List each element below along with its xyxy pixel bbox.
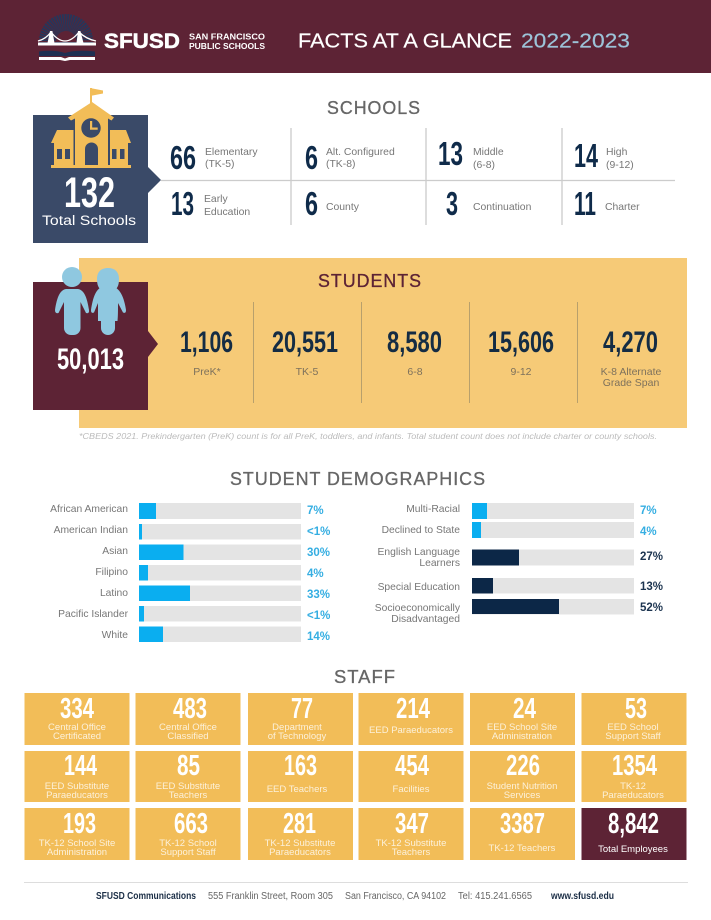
tile: 281 (248, 808, 353, 860)
footnote: *CBEDS 2021. Prekindergarten (PreK) count is for all PreK, toddlers, and infants. Total student count does not include charter or county schools. (79, 431, 657, 441)
tile: 281: Paraeducators (269, 847, 331, 858)
tile: 334: Central Office (48, 722, 106, 733)
tile: 3387: TK-12 Teachers (489, 843, 556, 854)
stat: alternatively configured: Alt. Configured (326, 147, 395, 158)
stat: elementary: (TK-5) (205, 159, 234, 170)
icon: SFUSD bridge and book logo (38, 23, 96, 61)
tile: 663 (136, 808, 240, 860)
stat: high: (9-12) (606, 160, 634, 171)
bar: Latino: 33% (307, 589, 330, 601)
stat: TK-5: 20,551 (272, 326, 338, 359)
stat: alternatively configured (305, 139, 395, 176)
stat: 6-8: 6-8 (407, 366, 423, 378)
icon: school building (51, 88, 131, 168)
stat: elementary: 66 (170, 139, 196, 176)
bar: English Language Learners: Learners (419, 558, 460, 569)
bar: Multi-Racial: Multi-Racial (406, 504, 460, 515)
footer contact line: San Francisco, CA 94102 (345, 891, 446, 902)
total students box (33, 267, 158, 410)
logo wordmark (104, 30, 266, 53)
bar: Pacific Islander: <1% (307, 610, 330, 622)
bar: Filipino: Filipino (95, 567, 128, 578)
tile: 483: Central Office (159, 722, 217, 733)
bar: Multi-Racial: 7% (640, 505, 657, 517)
tile: 1354: 1354 (612, 750, 657, 782)
stat: county: County (326, 202, 360, 213)
tile: 53: Support Staff (605, 731, 661, 742)
tile: 24: EED School Site (487, 722, 557, 733)
tile: 53 (582, 693, 686, 745)
stat: early education (171, 185, 250, 222)
tile: 193: Administration (47, 847, 107, 858)
heading: students: STUDENTS (318, 271, 422, 291)
tile: 214: 214 (396, 693, 430, 725)
stat: elementary (170, 139, 258, 176)
stat: middle: Middle (473, 147, 504, 158)
bar chart: student groups (375, 503, 663, 625)
bar: English Language Learners (378, 547, 663, 569)
tile: 77: 77 (291, 693, 313, 725)
stat: 9-12: 15,606 (488, 326, 554, 359)
stat: elementary: Elementary (205, 147, 258, 158)
tile: 281: TK-12 Substitute (265, 838, 335, 849)
bar: African American (50, 503, 324, 519)
stat: PreK (180, 326, 233, 378)
panel: students (33, 258, 687, 428)
tile: 193: TK-12 School Site (39, 838, 115, 849)
tile: 454: 454 (395, 750, 429, 782)
stat: K-8 alternate grade span: 4,270 (603, 326, 658, 359)
stat: charter (574, 185, 640, 222)
bar: Asian (102, 544, 330, 560)
stat: 9-12: 9-12 (510, 366, 532, 378)
footer contact line: Tel: 415.241.6565 (458, 891, 532, 902)
tile: 85 (136, 750, 240, 802)
stat: charter: Charter (605, 202, 640, 213)
bar: Asian: Asian (102, 546, 128, 557)
tile: 334: 334 (60, 693, 94, 725)
tile: 85: EED Substitute (156, 781, 220, 792)
total schools box: Total Schools (42, 213, 136, 228)
stat: TK-5: TK-5 (296, 366, 319, 378)
stat: county (305, 185, 360, 222)
tile: 144: EED Substitute (45, 781, 109, 792)
tile: 663: TK-12 School (159, 838, 217, 849)
tile: 214 (358, 693, 464, 745)
stat: high: 14 (574, 137, 598, 174)
stat: K-8 alternate grade span: Grade Span (603, 377, 659, 389)
bar: African American: 7% (307, 505, 324, 517)
tile: 347 (358, 808, 464, 860)
stat: early education: Education (204, 207, 250, 218)
tile: 77: Department (272, 722, 322, 733)
tile: 193 (24, 808, 130, 860)
stat: middle: 13 (438, 135, 463, 172)
stat: alternatively configured: (TK-8) (326, 159, 355, 170)
tile: 454 (358, 750, 464, 802)
stat: continuation (446, 185, 532, 222)
bar chart: race and ethnicity (50, 503, 330, 643)
bar: Pacific Islander: Pacific Islander (58, 609, 129, 620)
title (298, 30, 630, 52)
tile: 1354 (582, 750, 686, 802)
tile: 663: Support Staff (160, 847, 216, 858)
tile: 334: Certificated (53, 731, 101, 742)
stat: K-8 alternate grade span: K-8 Alternate (601, 366, 662, 378)
bar: American Indian (54, 524, 330, 540)
tile: 281: 281 (283, 808, 316, 840)
bar: Latino (100, 586, 330, 601)
tile: 226: Services (504, 790, 540, 801)
tile: 53: 53 (625, 693, 647, 725)
tile: 214: EED Paraeducators (369, 725, 453, 736)
tile: 347: 347 (395, 808, 429, 840)
panel: schools (33, 88, 675, 243)
bar: Special Education: Special Education (378, 582, 460, 593)
total students box: 50,013 (57, 343, 124, 376)
bar: Socioeconomically Disadvantaged: Disadvantaged (391, 614, 460, 625)
logo wordmark: SAN FRANCISCO (189, 32, 265, 42)
bar: Special Education: 13% (640, 581, 663, 593)
stat: county: 6 (305, 185, 318, 222)
tile: 663: 663 (174, 808, 208, 840)
panel: student demographics (50, 469, 663, 643)
tile: 24: 24 (513, 693, 536, 725)
bar: White: 14% (307, 631, 330, 643)
bar: Socioeconomically Disadvantaged: Socioeconomically (375, 603, 461, 614)
stat: continuation: 3 (446, 185, 458, 222)
bar: African American: African American (50, 504, 128, 515)
tile: 347: Teachers (392, 847, 431, 858)
stat: early education: Early (204, 194, 228, 205)
tile: 24: Administration (492, 731, 552, 742)
stat: charter: 11 (574, 185, 596, 222)
tile: 483: 483 (173, 693, 207, 725)
stat: 9-12 (488, 326, 554, 378)
tile: total employees (582, 808, 686, 860)
tile: 334 (24, 693, 130, 745)
tile: 163: 163 (284, 750, 317, 782)
footer contact line: www.sfusd.edu (550, 891, 614, 902)
heading: staff: STAFF (334, 667, 396, 687)
heading: student demographics: STUDENT DEMOGRAPHICS (230, 469, 486, 489)
bar: American Indian: American Indian (54, 525, 128, 536)
tile: 3387: 3387 (500, 808, 545, 840)
stat: 6-8: 8,580 (387, 326, 442, 359)
tile: 1354: TK-12 (620, 781, 646, 792)
stat: middle (438, 135, 504, 172)
tile: 226: Student Nutrition (487, 781, 557, 792)
bar: Pacific Islander (58, 606, 330, 622)
tile: 77 (248, 693, 353, 745)
bar: Socioeconomically Disadvantaged (375, 599, 663, 625)
bar: Filipino: 4% (307, 568, 324, 580)
bar: White (102, 626, 330, 643)
tile: total employees: Total Employees (598, 844, 668, 855)
tile: 85: Teachers (169, 790, 208, 801)
bar: Filipino (95, 565, 324, 580)
panel: staff (24, 667, 686, 860)
total schools box: 132 (64, 169, 115, 217)
tile: 77: of Technology (268, 731, 326, 742)
total schools box (33, 88, 161, 243)
tile: total employees: 8,842 (608, 808, 659, 840)
title: FACTS AT A GLANCE (298, 30, 512, 52)
tile: 3387 (470, 808, 575, 860)
stat: 6-8 (387, 326, 442, 378)
stat: high: High (606, 147, 628, 158)
bar: Declined to State: 4% (640, 526, 657, 538)
footer contact line (96, 891, 614, 902)
bar: Latino: Latino (100, 588, 128, 599)
heading: schools: SCHOOLS (327, 98, 421, 118)
bar: Socioeconomically Disadvantaged: 52% (640, 602, 663, 614)
bar: Declined to State (382, 522, 657, 538)
stat: middle: (6-8) (473, 160, 495, 171)
logo wordmark: SFUSD (104, 30, 180, 53)
tile: 483: Classified (167, 731, 209, 742)
bar: Multi-Racial (406, 503, 657, 519)
tile: 454: Facilities (393, 784, 430, 795)
stat: PreK: PreK* (193, 366, 221, 378)
tile: 226: 226 (506, 750, 540, 782)
tile: 144 (24, 750, 130, 802)
tile: 53: EED School (607, 722, 659, 733)
tile: 1354: Paraeducators (602, 790, 664, 801)
bar: White: White (102, 630, 128, 641)
footer contact line: SFUSD Communications (96, 891, 196, 902)
stat: early education: 13 (171, 185, 194, 222)
tile: 193: 193 (63, 808, 96, 840)
bar: English Language Learners: 27% (640, 551, 663, 563)
tile: 144: Paraeducators (46, 790, 108, 801)
tile: 24 (470, 693, 575, 745)
footer contact line: 555 Franklin Street, Room 305 (208, 891, 333, 902)
tile: 347: TK-12 Substitute (376, 838, 446, 849)
logo wordmark: PUBLIC SCHOOLS (189, 42, 266, 51)
bar: Asian: 30% (307, 547, 330, 559)
bar: American Indian: <1% (307, 526, 330, 538)
tile: 85: 85 (177, 750, 200, 782)
bar: English Language Learners: English Language (378, 547, 460, 558)
stat: alternatively configured: 6 (305, 139, 318, 176)
tile: 163: EED Teachers (267, 784, 328, 795)
tile: 163 (248, 750, 353, 802)
icon: two children (55, 267, 126, 335)
tile: 144: 144 (64, 750, 97, 782)
tile: 483 (136, 693, 240, 745)
title: 2022-2023 (521, 30, 630, 52)
stat: TK-5 (272, 326, 338, 378)
tile: 226 (470, 750, 575, 802)
stat: continuation: Continuation (473, 202, 532, 213)
header banner (0, 0, 711, 73)
stat: high (574, 137, 634, 174)
bar: Special Education (378, 578, 663, 594)
stat: PreK: 1,106 (180, 326, 233, 359)
bar: Declined to State: Declined to State (382, 525, 460, 536)
stat: K-8 alternate grade span (601, 326, 662, 389)
